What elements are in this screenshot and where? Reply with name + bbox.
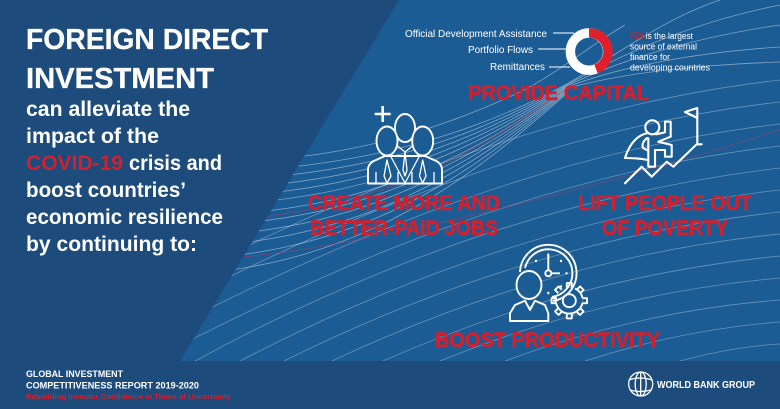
footer: report title — [26, 369, 232, 401]
title: INVESTMENT — [26, 63, 214, 95]
donut labels — [405, 28, 547, 73]
intro text: economic resilience — [26, 206, 223, 229]
FDI note: source of external — [630, 42, 697, 52]
donut labels: Official Development Assistance — [405, 28, 547, 40]
FDI note — [630, 31, 710, 72]
title: FOREIGN DIRECT — [26, 24, 268, 56]
icon: climber with flag — [625, 108, 702, 183]
intro text: by continuing to: — [26, 233, 197, 256]
intro text: boost countries’ — [26, 179, 186, 202]
heading: lift people out of poverty — [578, 192, 752, 240]
heading: lift people out of poverty: OF POVERTY — [602, 217, 728, 240]
intro text: COVID-19 — [26, 152, 123, 175]
footer: report title: Rebuilding Investor Confidence in Times of Uncertainty — [26, 392, 232, 401]
icon: clock, person and gear — [510, 245, 587, 321]
lighter diagonal panel — [180, 0, 780, 361]
intro text: can alleviate the — [26, 98, 190, 121]
footer: report title: COMPETITIVENESS REPORT 2019-2020 — [26, 380, 199, 390]
heading: create more and better-paid jobs — [308, 192, 500, 240]
logo: World Bank Group — [629, 372, 755, 396]
heading: lift people out of poverty: LIFT PEOPLE OUT — [578, 192, 752, 215]
FDI note: FDI is the largest — [630, 31, 693, 41]
logo: World Bank Group: WORLD BANK GROUP — [657, 379, 755, 391]
footer bar — [0, 361, 780, 409]
donut labels: Portfolio Flows — [468, 44, 533, 56]
wave line pattern — [150, 0, 780, 361]
intro text: impact of the — [26, 125, 159, 148]
heading: boost productivity: BOOST PRODUCTIVITY — [435, 329, 660, 352]
donut chart — [570, 33, 608, 70]
donut labels: Remittances — [490, 61, 545, 73]
FDI note: finance for — [630, 52, 670, 62]
donut leader lines — [538, 33, 574, 67]
icon: people with plus — [368, 106, 442, 184]
title — [26, 24, 268, 95]
heading: create more and better-paid jobs: CREATE MORE AND — [308, 192, 500, 215]
footer: report title: GLOBAL INVESTMENT — [26, 369, 123, 379]
FDI note: developing countries — [630, 62, 710, 72]
heading: create more and better-paid jobs: BETTER-PAID JOBS — [310, 217, 498, 240]
intro text — [26, 98, 223, 256]
heading: provide capital: PROVIDE CAPITAL — [468, 82, 649, 105]
intro text: crisis and — [129, 152, 222, 175]
